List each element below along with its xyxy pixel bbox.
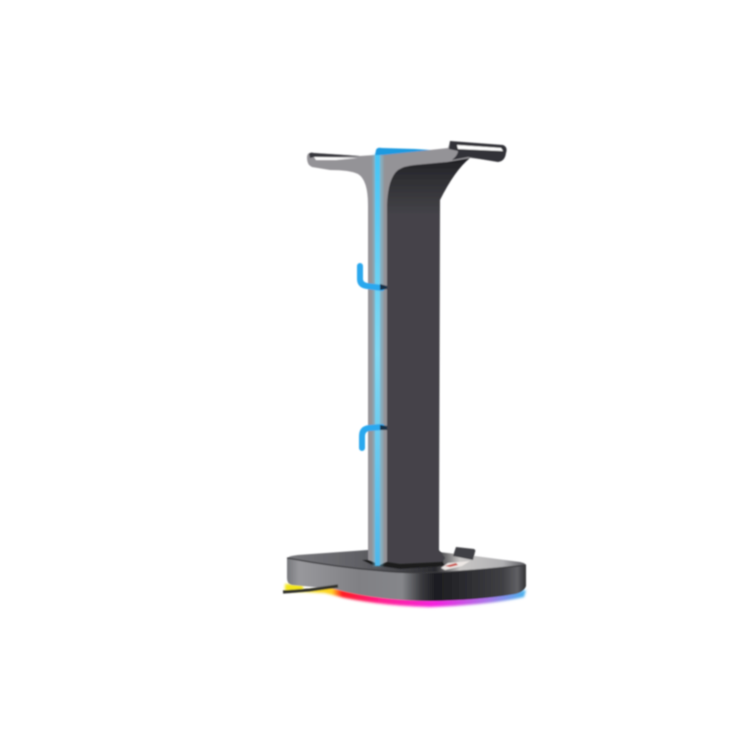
grey stem with left and right arms: [307, 142, 506, 565]
right arm cradle: [449, 141, 507, 162]
blue light strip glow: [373, 154, 383, 566]
black inner panel: [387, 158, 470, 564]
blue top edge: [375, 148, 431, 155]
power cable: [283, 586, 338, 592]
base shadow under stem: [362, 556, 445, 569]
lower blue hook: [362, 427, 382, 448]
base top surface: [287, 550, 526, 573]
RGB light strip: [285, 584, 526, 607]
left arm slot: [314, 157, 358, 160]
base front edge line: [287, 558, 526, 573]
logo badge on base: [441, 561, 470, 570]
blue light strip on stem: [375, 154, 380, 566]
base with RGB light strip: [283, 547, 526, 607]
stem and arms: [307, 141, 507, 566]
upper blue hook: [360, 266, 382, 288]
base front face: [287, 558, 526, 601]
charging dock tab: [453, 547, 475, 560]
